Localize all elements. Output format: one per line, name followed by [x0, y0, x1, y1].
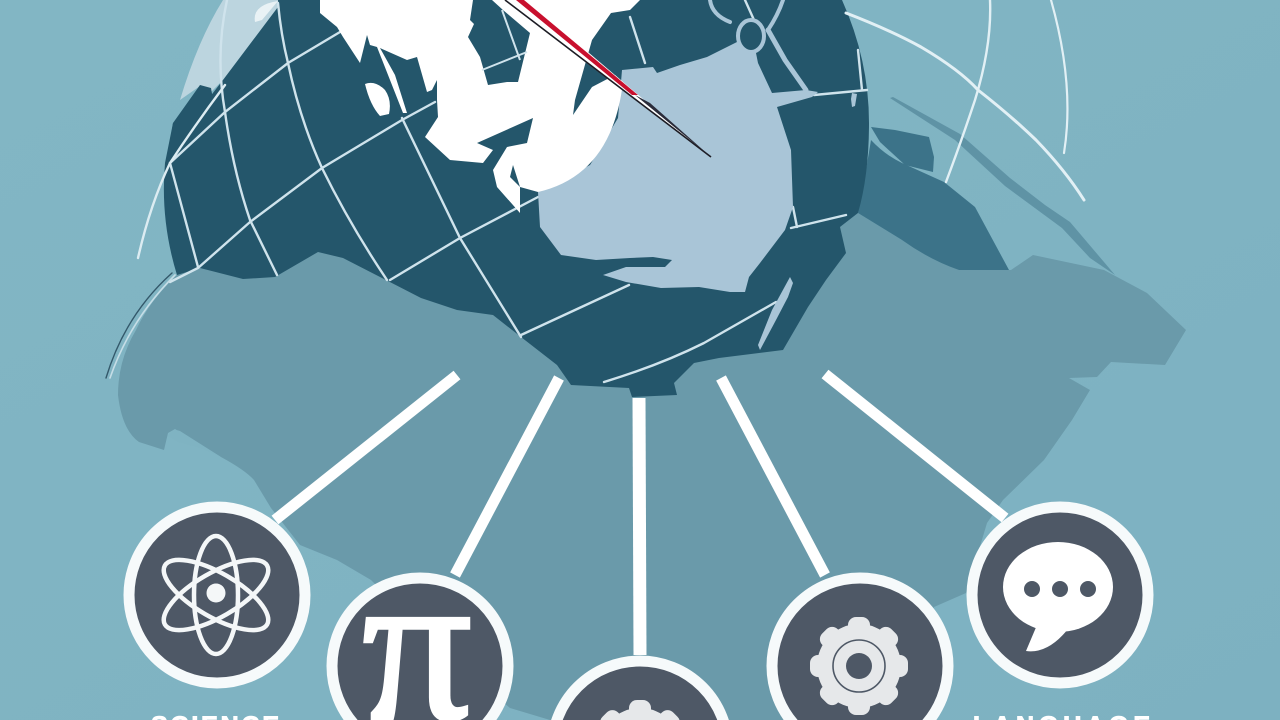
globe dark body — [164, 0, 869, 397]
far island — [871, 127, 934, 172]
icon: engineering gear — [772, 578, 948, 720]
white land mass — [320, 0, 640, 213]
small lake right — [851, 93, 857, 107]
distant shadow streak — [890, 97, 1115, 275]
small island at globe edge — [168, 85, 214, 157]
white blob top left — [255, 1, 278, 22]
icon: science atom — [129, 507, 305, 683]
grid lines on globe — [170, 0, 867, 382]
globe cast shadow — [118, 213, 1186, 720]
shadow inlet — [168, 430, 221, 457]
outer orbit arcs — [106, 0, 1084, 378]
connector lines — [275, 374, 1005, 655]
icon: technology gear — [552, 661, 728, 720]
light blue continent — [538, 42, 818, 292]
north-east lakes — [710, 0, 806, 90]
icon: language speech bubble — [972, 507, 1148, 683]
dark inland sea — [468, 0, 530, 85]
far land mass — [858, 140, 1009, 270]
pale land behind globe — [180, 0, 285, 100]
icon: math pi — [332, 526, 508, 720]
needle — [503, 0, 711, 157]
white lake shape — [365, 83, 390, 116]
south lakes — [758, 277, 793, 350]
